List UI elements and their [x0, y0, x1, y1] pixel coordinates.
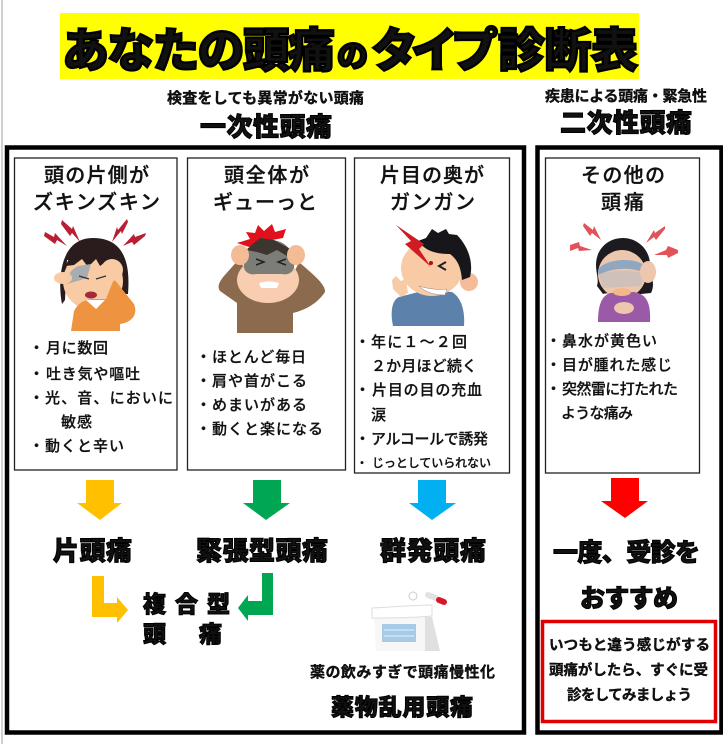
symptom list: 突然雷に打たれた — [562, 381, 678, 398]
card subheading: ズキンズキン — [33, 191, 160, 214]
symptom list — [355, 334, 491, 470]
symptom list: ・ — [196, 397, 211, 414]
symptom list: 敏感 — [61, 413, 92, 431]
symptom list: ・ — [196, 349, 211, 366]
symptom list — [196, 349, 323, 438]
card heading: その他の — [581, 164, 665, 187]
card: other headache — [546, 158, 700, 473]
symptom list: ・ — [355, 431, 370, 448]
symptom list: ような痛み — [561, 405, 633, 422]
symptom list: 涙 — [371, 407, 386, 424]
text: medication overuse note: 薬の飲みすぎで頭痛慢性化 — [310, 663, 495, 681]
title: タイプ — [371, 24, 498, 77]
label: mixed headache: 型 — [207, 591, 230, 617]
label: migraine: 片頭痛 — [53, 536, 132, 566]
heading: secondary headache — [545, 87, 707, 138]
heading: secondary headache: 疾患による頭痛・緊急性 — [545, 87, 707, 105]
card: whole head — [188, 158, 346, 470]
symptom list: ・ — [355, 382, 370, 399]
symptom list: ２か月ほど続く — [371, 357, 477, 375]
title: あなたの頭痛 — [62, 24, 335, 77]
icon: man gripping head — [219, 224, 325, 333]
card: behind one eye — [354, 158, 510, 473]
symptom list: 片目の目の充血 — [372, 382, 482, 399]
heading: secondary headache: 二次性頭痛 — [560, 108, 692, 138]
symptom list — [546, 332, 678, 422]
label: mixed headache: 痛 — [199, 621, 222, 647]
symptom list: ・ — [546, 357, 561, 374]
arrow: blue down — [409, 480, 456, 520]
arrow: yellow elbow — [92, 576, 128, 623]
card heading: 頭全体が — [224, 164, 309, 187]
card subheading: ギューっと — [213, 191, 317, 214]
label: mixed headache — [143, 591, 230, 647]
icon: woman with one-sided headache — [44, 219, 146, 331]
icon: woman with other headache — [570, 223, 678, 322]
arrow: green down — [243, 480, 290, 520]
card: one side of head — [14, 158, 177, 470]
symptom list: ほとんど毎日 — [212, 349, 306, 366]
recommendation: see a doctor — [553, 539, 700, 613]
symptom list: 光、音、においに — [45, 390, 173, 407]
symptom list: 目が腫れた感じ — [562, 356, 672, 374]
panel: primary headache — [7, 148, 524, 732]
symptom list: ・ — [546, 381, 561, 398]
card subheading: ガンガン — [390, 191, 475, 214]
symptom list: 動くと辛い — [45, 438, 124, 455]
arrow: green elbow — [238, 573, 273, 621]
symptom list: ・ — [196, 373, 211, 390]
label: cluster headache: 群発頭痛 — [380, 536, 486, 566]
callout: 診をしてみましょう — [567, 687, 692, 704]
symptom list: ・ — [355, 334, 370, 351]
card heading: 片目の奥が — [380, 164, 484, 187]
heading: primary headache — [167, 89, 364, 142]
symptom list: ・ — [29, 438, 44, 455]
panel: secondary headache — [538, 148, 722, 732]
symptom list: 年に１～２回 — [371, 334, 467, 351]
title — [60, 13, 639, 79]
symptom list: 吐き気や嘔吐 — [46, 366, 140, 383]
heading: primary headache: 一次性頭痛 — [200, 112, 332, 142]
title: 診断表 — [498, 24, 638, 77]
heading: primary headache: 検査をしても異常がない頭痛 — [167, 89, 364, 107]
card subheading: 頭痛 — [601, 191, 644, 214]
symptom list: 月に数回 — [46, 340, 108, 357]
symptom list: ・ — [29, 366, 44, 383]
callout: いつもと違う感じがする — [549, 636, 710, 654]
card heading: 頭の片側が — [44, 164, 149, 187]
label: medication overuse headache: 薬物乱用頭痛 — [331, 694, 473, 720]
symptom list: アルコールで誘発 — [371, 431, 488, 448]
symptom list — [29, 340, 173, 455]
title: の — [337, 39, 368, 74]
callout — [542, 622, 716, 722]
symptom list: 動くと楽になる — [212, 421, 323, 438]
icon: medicine box — [372, 592, 444, 651]
symptom list: ・ — [29, 340, 44, 357]
label: mixed headache: 複 — [143, 591, 166, 617]
symptom list: じっとしていられない — [372, 456, 491, 470]
arrow: red down — [601, 478, 648, 518]
label: mixed headache: 合 — [175, 591, 198, 617]
label: mixed headache: 頭 — [143, 621, 166, 647]
symptom list: ・ — [29, 390, 44, 407]
symptom list: 鼻水が黄色い — [562, 332, 657, 350]
symptom list: めまいがある — [212, 396, 307, 414]
symptom list: ・ — [356, 456, 368, 470]
recommendation: see a doctor: おすすめ — [580, 585, 678, 613]
arrow: yellow down — [77, 480, 122, 520]
symptom list: 肩や首がこる — [212, 372, 307, 390]
symptom list: ・ — [196, 421, 211, 438]
symptom list: ・ — [546, 333, 561, 350]
icon: man with eye pain — [392, 225, 478, 326]
label: tension headache: 緊張型頭痛 — [196, 536, 328, 566]
recommendation: see a doctor: 一度、受診を — [553, 539, 700, 567]
callout: 頭痛がしたら、すぐに受 — [549, 661, 708, 679]
